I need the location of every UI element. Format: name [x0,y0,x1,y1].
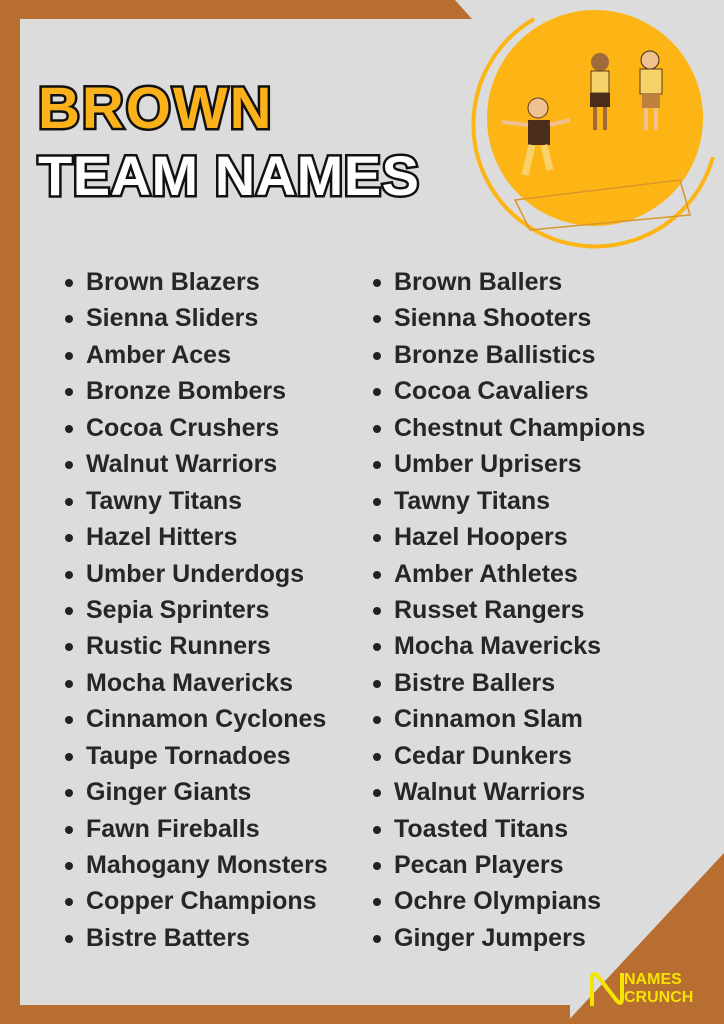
list: left column: Ginger Giants [86,778,251,806]
list: right column: Chestnut Champions [394,414,645,442]
list: right column: Sienna Shooters [394,304,591,332]
list: right column: Hazel Hoopers [394,523,568,551]
list: left column: Bronze Bombers [86,377,286,405]
title line: TEAM NAMES: TEAM NAMES [38,144,419,207]
list: left column: Tawny Titans [86,487,242,515]
list: right column: Cedar Dunkers [394,742,572,770]
list: left column: Sepia Sprinters [86,596,269,624]
list: right column: Mocha Mavericks [394,632,601,660]
logo text: CRUNCH [624,989,693,1006]
list: right column: Toasted Titans [394,815,568,843]
list: right column: Cocoa Cavaliers [394,377,589,405]
list: right column [373,268,645,952]
kid 2 [591,53,609,71]
list: left column: Sienna Sliders [86,304,258,332]
list: left column: Amber Aces [86,341,231,369]
logo text [624,971,693,1006]
list: left column: Mocha Mavericks [86,669,293,697]
list: right column: Ginger Jumpers [394,924,586,952]
list: right column: Bronze Ballistics [394,341,595,369]
list: left column: Taupe Tornadoes [86,742,291,770]
icon: N logo [590,972,624,1006]
list: left column: Copper Champions [86,887,317,915]
list: left column: Cocoa Crushers [86,414,279,442]
list: right column: Umber Uprisers [394,450,582,478]
list: right column: Ochre Olympians [394,887,601,915]
list: right column: Amber Athletes [394,560,578,588]
list: left column: Walnut Warriors [86,450,277,478]
list: left column: Bistre Batters [86,924,250,952]
list: right column: Bistre Ballers [394,669,555,697]
list: left column: Brown Blazers [86,268,260,296]
kid 1 [528,98,548,118]
list: left column: Mahogany Monsters [86,851,328,879]
list: right column: Russet Rangers [394,596,584,624]
title [36,76,420,207]
list: left column: Umber Underdogs [86,560,304,588]
list: right column: Cinnamon Slam [394,705,583,733]
list: left column: Hazel Hitters [86,523,237,551]
list: left column: Rustic Runners [86,632,271,660]
illustration: kids playing hopscotch in yellow circle [471,10,715,248]
kid 3 [641,51,659,69]
list: left column [65,268,328,952]
list: right column: Tawny Titans [394,487,550,515]
list: right column: Brown Ballers [394,268,562,296]
list: left column: Cinnamon Cyclones [86,705,326,733]
list: right column: Pecan Players [394,851,564,879]
list: right column: Walnut Warriors [394,778,585,806]
list: left column: Fawn Fireballs [86,815,260,843]
logo: Names Crunch [590,971,693,1006]
logo text: NAMES [624,971,682,988]
title line: BROWN: BROWN [38,76,274,141]
